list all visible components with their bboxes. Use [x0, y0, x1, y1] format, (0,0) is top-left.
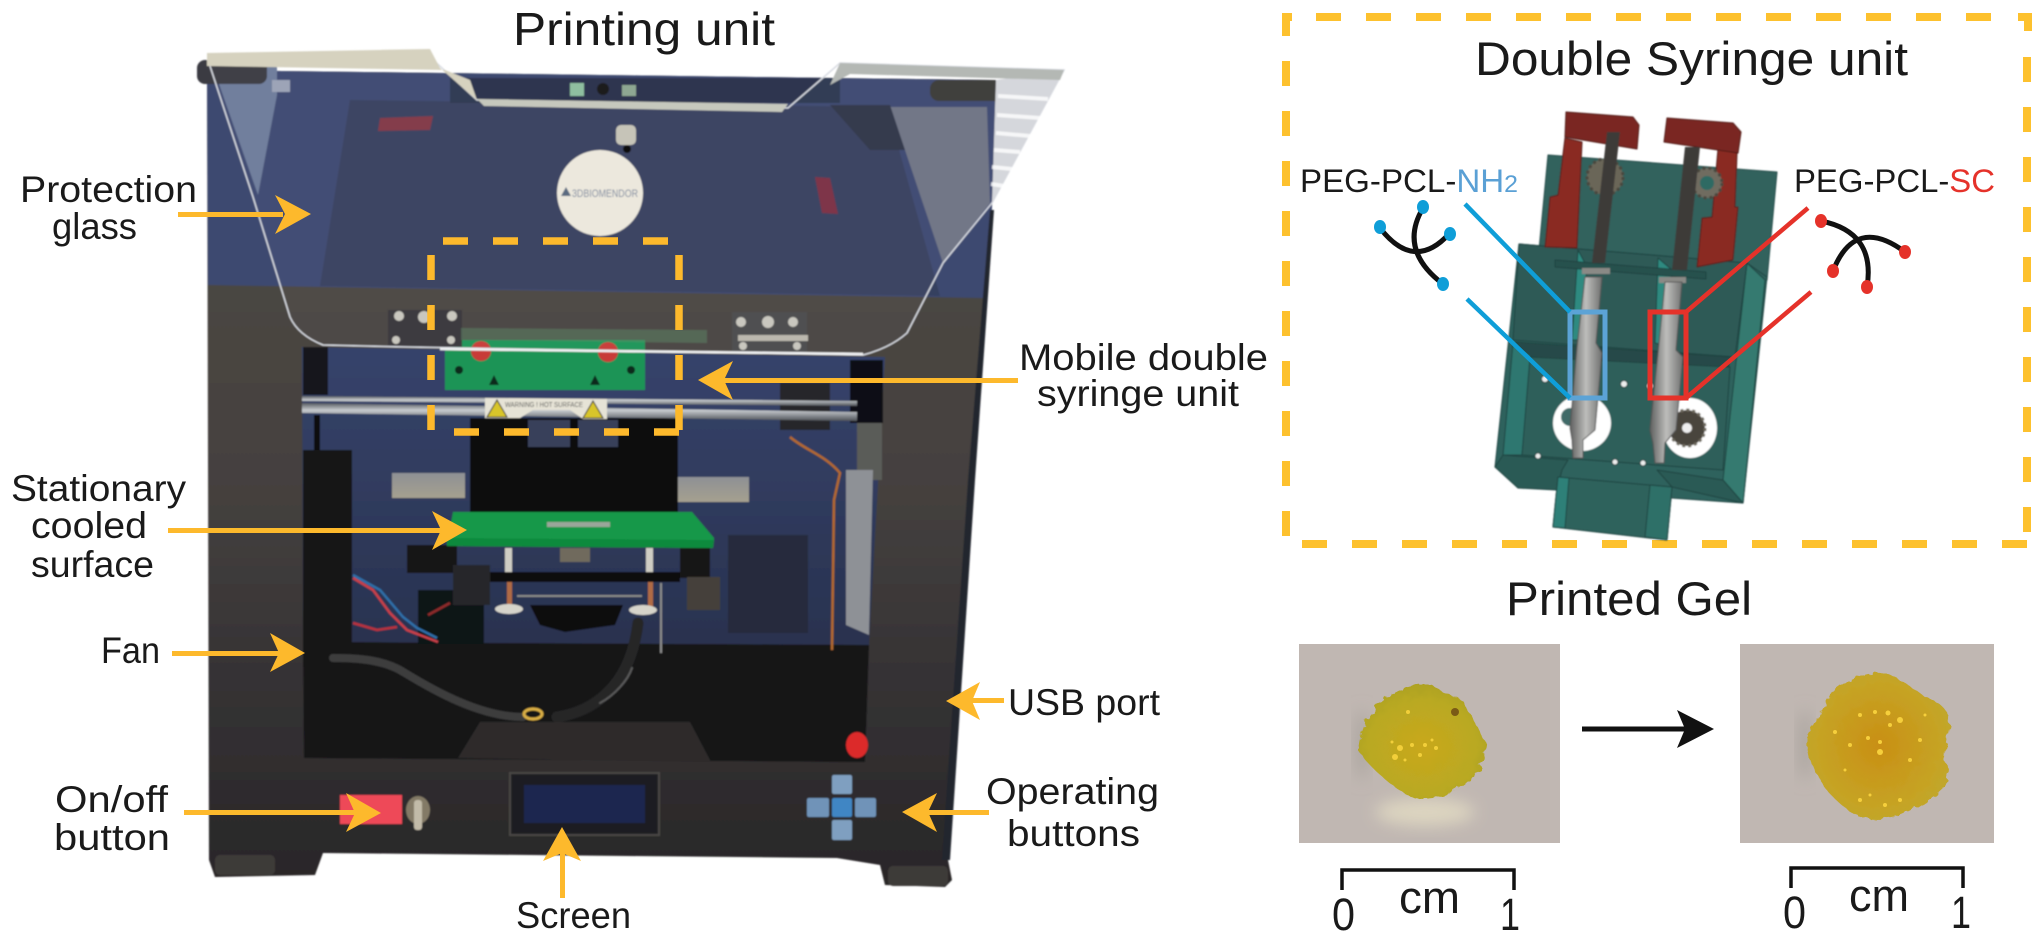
- arrow: mobile syringe unit: [698, 361, 1018, 400]
- feet: [215, 855, 948, 886]
- label: PEG-PCL-NH2: PEG-PCL-NH2: [1300, 163, 1518, 199]
- arrow: stationary surface: [168, 511, 467, 550]
- syringe collars: [1582, 268, 1686, 283]
- printer photo: [197, 49, 1064, 887]
- white gear openings: [1553, 395, 1717, 458]
- blue callout lines: [1465, 204, 1570, 398]
- hinges: [388, 310, 808, 352]
- small gears: [1587, 159, 1722, 198]
- right edge shadow: [942, 210, 994, 860]
- hoses: [333, 623, 638, 717]
- warning label: [485, 398, 607, 419]
- round logo sticker: [557, 150, 643, 236]
- arrow: operating buttons: [902, 793, 989, 832]
- protection glass: [207, 49, 1064, 355]
- upper blue panel: [207, 70, 996, 298]
- scale bar: left: [1332, 870, 1520, 940]
- label: Mobile double syringe unit: [1019, 337, 1268, 414]
- plunger rods: [1592, 132, 1700, 270]
- printer body: [207, 70, 996, 887]
- photo: gel after swelling: [1740, 644, 1994, 843]
- icon: blue four-arm polymer: [1374, 200, 1456, 291]
- title: Printed Gel: Printed Gel: [1506, 572, 1752, 625]
- label: Stationary cooled surface: surface: [31, 544, 154, 585]
- label: Stationary cooled surface: [11, 468, 187, 585]
- scale bar: right: 1: [1951, 887, 1971, 938]
- fan: [303, 450, 352, 667]
- label: On/off button: [54, 779, 170, 858]
- label: Stationary cooled surface: Stationary: [11, 468, 187, 509]
- window interior floor: [303, 642, 869, 762]
- red callout lines: [1686, 208, 1811, 398]
- photo: gel before swelling: [1299, 644, 1560, 843]
- red power sticker: [340, 795, 402, 824]
- label: Operating buttons: Operating: [986, 771, 1159, 812]
- label: Stationary cooled surface: cooled: [31, 505, 147, 546]
- arrow: before to after: [1582, 710, 1714, 748]
- darker centre of upper panel: [320, 100, 940, 296]
- label: On/off button: button: [54, 817, 170, 858]
- bottom tab: [1553, 477, 1672, 540]
- left syringe barrel: [1570, 277, 1602, 458]
- blue highlight box: [1570, 312, 1605, 398]
- scale bar: right: [1783, 868, 1971, 938]
- bed support frame: [453, 548, 720, 653]
- round logo sticker: 3DBIOMENDOR: [572, 188, 638, 200]
- label: Operating buttons: buttons: [1007, 813, 1140, 854]
- label: PEG-PCL-SC: PEG-PCL-SC: [1794, 163, 1995, 199]
- title: Double Syringe unit: Double Syringe unit: [1475, 32, 1908, 85]
- back plate: [1539, 155, 1777, 280]
- label: Operating buttons: [986, 771, 1159, 854]
- label: Protection glass: Protection: [20, 169, 197, 210]
- main block: [1495, 244, 1767, 503]
- syringe unit CAD drawing: [1495, 112, 1777, 540]
- panel: double syringe unit dashed frame: [1286, 17, 2030, 544]
- title: Printing unit: Printing unit: [513, 3, 775, 55]
- rails: [302, 396, 857, 421]
- label: On/off button: On/off: [55, 779, 169, 820]
- label: Protection glass: [20, 169, 197, 247]
- right side electronics: [780, 360, 883, 650]
- scale bar: left: 1: [1500, 889, 1520, 940]
- scale bar: left: 0: [1332, 889, 1355, 940]
- toggle switch: [406, 796, 430, 830]
- right syringe barrel: [1650, 282, 1683, 463]
- warning label: WARNING ! HOT SURFACE: [505, 402, 583, 409]
- stationary cooled surface: [447, 512, 714, 548]
- label: Screen: Screen: [516, 895, 631, 936]
- gold cable knot: [524, 709, 542, 719]
- arrow: on/off button: [184, 793, 381, 832]
- screen housing: [458, 722, 711, 762]
- right red holder: [1664, 118, 1741, 267]
- scale bar: right: cm: [1849, 870, 1909, 921]
- label: Mobile double syringe unit: Mobile double: [1019, 337, 1268, 378]
- arrow: USB port: [946, 682, 1004, 720]
- glass bolt: [616, 125, 636, 153]
- icon: red four-arm polymer: [1815, 214, 1911, 294]
- scale bar: left: cm: [1399, 872, 1460, 923]
- label: Mobile double syringe unit: syringe unit: [1037, 373, 1240, 414]
- label: USB port: USB port: [1008, 682, 1161, 723]
- black carriage column: [470, 418, 678, 513]
- dark back patches: [392, 473, 808, 644]
- label: Fan: Fan: [101, 630, 160, 671]
- window interior back wall: [302, 347, 885, 645]
- mobile syringe carriage board: [445, 340, 645, 390]
- LCD screen: [510, 773, 659, 835]
- left small gear: [1561, 408, 1579, 426]
- arrow: fan: [172, 633, 305, 672]
- wires: [353, 575, 450, 642]
- scale bar: right: 0: [1783, 887, 1806, 938]
- red ball: [846, 732, 868, 758]
- lighter glass corners: [213, 67, 990, 263]
- arrow: protection glass: [178, 195, 311, 234]
- mounting holes: [1535, 376, 1654, 466]
- red highlight box: [1650, 312, 1686, 398]
- arrow: screen: [543, 827, 581, 898]
- dashed highlight box on printer: [431, 241, 679, 436]
- gear: [1669, 410, 1705, 446]
- left red holder: [1545, 112, 1639, 248]
- top bar fittings: [197, 60, 1008, 214]
- operating button pad: [807, 775, 876, 840]
- label: Protection glass: glass: [52, 206, 137, 247]
- left bracket and cable: [303, 347, 328, 453]
